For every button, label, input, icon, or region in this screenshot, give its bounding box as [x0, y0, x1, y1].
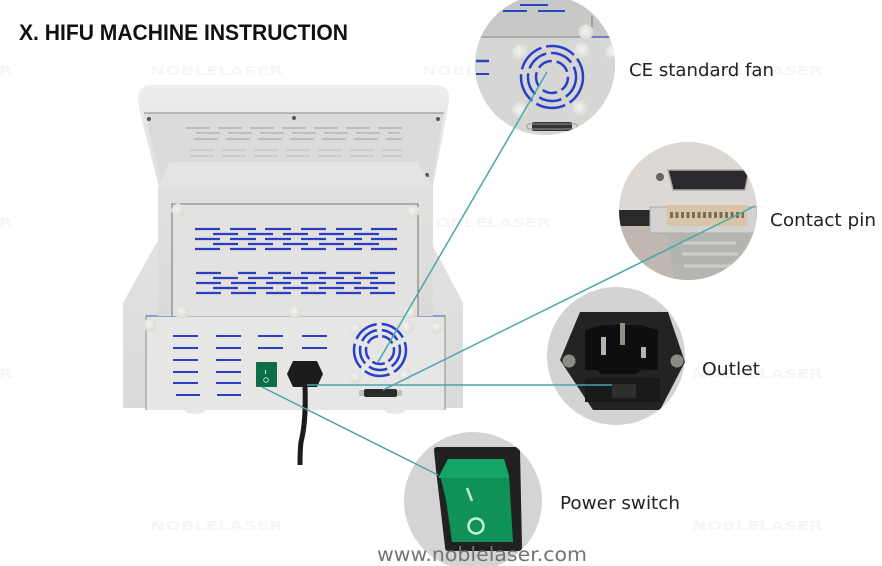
inset: outlet	[545, 285, 690, 430]
lower base shoulders	[123, 240, 463, 408]
watermarks: NOBLELASER	[150, 64, 283, 78]
website url: www.noblelaser.com	[377, 543, 587, 566]
watermarks: NOBLELASER	[150, 519, 283, 533]
label: Outlet: Outlet	[702, 360, 760, 380]
watermarks: NOBLELASER	[692, 519, 823, 533]
inset: contact pin	[619, 142, 757, 280]
watermarks	[0, 64, 823, 533]
label: Contact pin: Contact pin	[770, 211, 876, 231]
middle box	[158, 162, 433, 316]
leader line: contact pin	[383, 206, 755, 390]
watermarks: NOBLELASER	[420, 216, 551, 230]
power switch	[256, 362, 277, 387]
lower base panel	[146, 316, 445, 414]
monitor top	[138, 85, 449, 190]
inset: power switch	[400, 430, 546, 566]
machine illustration	[123, 85, 463, 465]
leader line: power switch	[262, 387, 438, 475]
watermarks: NOBLELASER	[692, 367, 823, 381]
inset: fan	[475, 0, 619, 140]
label: CE standard fan: CE standard fan	[629, 61, 774, 81]
watermarks: NOBLELASER	[692, 64, 823, 78]
screws	[144, 204, 444, 384]
title: X. HIFU MACHINE INSTRUCTION	[19, 20, 348, 45]
leader line: outlet	[307, 384, 612, 386]
watermarks: NOBLELASER	[422, 64, 552, 78]
DB connector	[359, 389, 402, 397]
fan grille	[354, 324, 406, 376]
leader line: fan	[378, 72, 547, 362]
label: Power switch: Power switch	[560, 494, 680, 514]
power outlet and cable	[287, 361, 323, 465]
